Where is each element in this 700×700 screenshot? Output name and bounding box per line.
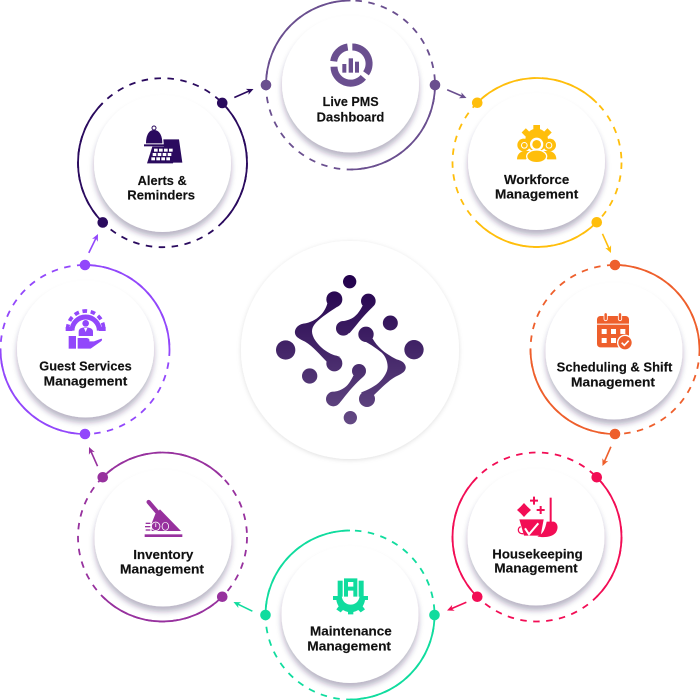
panel: Workforce Management — [452, 78, 622, 247]
ring — [261, 0, 440, 170]
heading — [127, 174, 195, 202]
disc — [468, 93, 605, 230]
arrow: dashboard to workforce — [446, 87, 468, 101]
icon: gear and team — [517, 125, 556, 163]
heading — [307, 625, 392, 654]
ring — [452, 78, 622, 247]
arrow: scheduling to housekeeping — [600, 445, 614, 467]
ring — [78, 452, 247, 622]
arrow: guest services to alerts — [86, 233, 101, 254]
heading: Workforce — [504, 173, 569, 187]
heading: Management — [120, 562, 205, 576]
panel: Housekeeping Management — [452, 452, 622, 622]
panel: Live PMS Dashboard — [261, 0, 440, 170]
heading: Guest Services — [39, 360, 132, 374]
heading: Management — [44, 375, 128, 389]
ring — [530, 260, 700, 439]
heading: Management — [494, 562, 579, 576]
icon: molecular S logo — [276, 275, 424, 424]
heading: Maintenance — [310, 625, 392, 639]
arrow: alerts to dashboard — [233, 86, 255, 100]
disc — [94, 95, 231, 232]
disc — [282, 16, 419, 152]
heading: Housekeeping — [492, 547, 583, 561]
icon: knife cutting on board — [145, 502, 182, 537]
disc — [94, 470, 232, 606]
panel: Maintenance Management — [260, 530, 440, 700]
icon: donut chart with bars — [334, 47, 369, 83]
panel: Inventory Management — [78, 452, 247, 622]
arrow: workforce to scheduling — [600, 233, 614, 254]
heading: Live PMS — [323, 95, 379, 109]
ring — [260, 530, 440, 700]
arrow: housekeeping to maintenance — [446, 599, 468, 613]
disc — [17, 280, 154, 418]
heading: Management — [495, 187, 579, 201]
central disc — [241, 241, 459, 459]
disc — [546, 282, 682, 420]
heading: Management — [571, 376, 656, 390]
panel: central logo — [241, 241, 459, 459]
heading: Inventory — [133, 548, 193, 562]
panel: Scheduling and Shift Management — [530, 260, 700, 439]
arrow: inventory to guest services — [86, 446, 100, 467]
icon: bucket, broom and sparkles — [517, 497, 558, 537]
heading — [317, 95, 384, 124]
disc — [282, 546, 418, 683]
panel: Guest Services Management — [0, 260, 170, 439]
heading: Scheduling & Shift — [557, 361, 673, 375]
panel: Alerts and Reminders — [78, 78, 247, 247]
heading — [557, 361, 673, 390]
heading — [39, 360, 132, 389]
heading — [495, 173, 579, 201]
icon: gear and tower — [333, 578, 368, 614]
disc — [468, 468, 604, 606]
arrow: maintenance to inventory — [232, 599, 254, 614]
ring — [452, 452, 622, 622]
heading — [492, 547, 583, 576]
heading: Alerts & — [138, 174, 187, 188]
ring — [78, 78, 247, 247]
ring — [0, 260, 170, 439]
icon: gear, person and hand — [66, 311, 106, 349]
heading: Dashboard — [317, 110, 384, 124]
heading: Reminders — [127, 188, 195, 202]
heading: Management — [307, 640, 392, 654]
icon: bell and calendar — [144, 126, 182, 163]
heading — [120, 548, 205, 576]
icon: calendar with check badge — [597, 313, 633, 351]
